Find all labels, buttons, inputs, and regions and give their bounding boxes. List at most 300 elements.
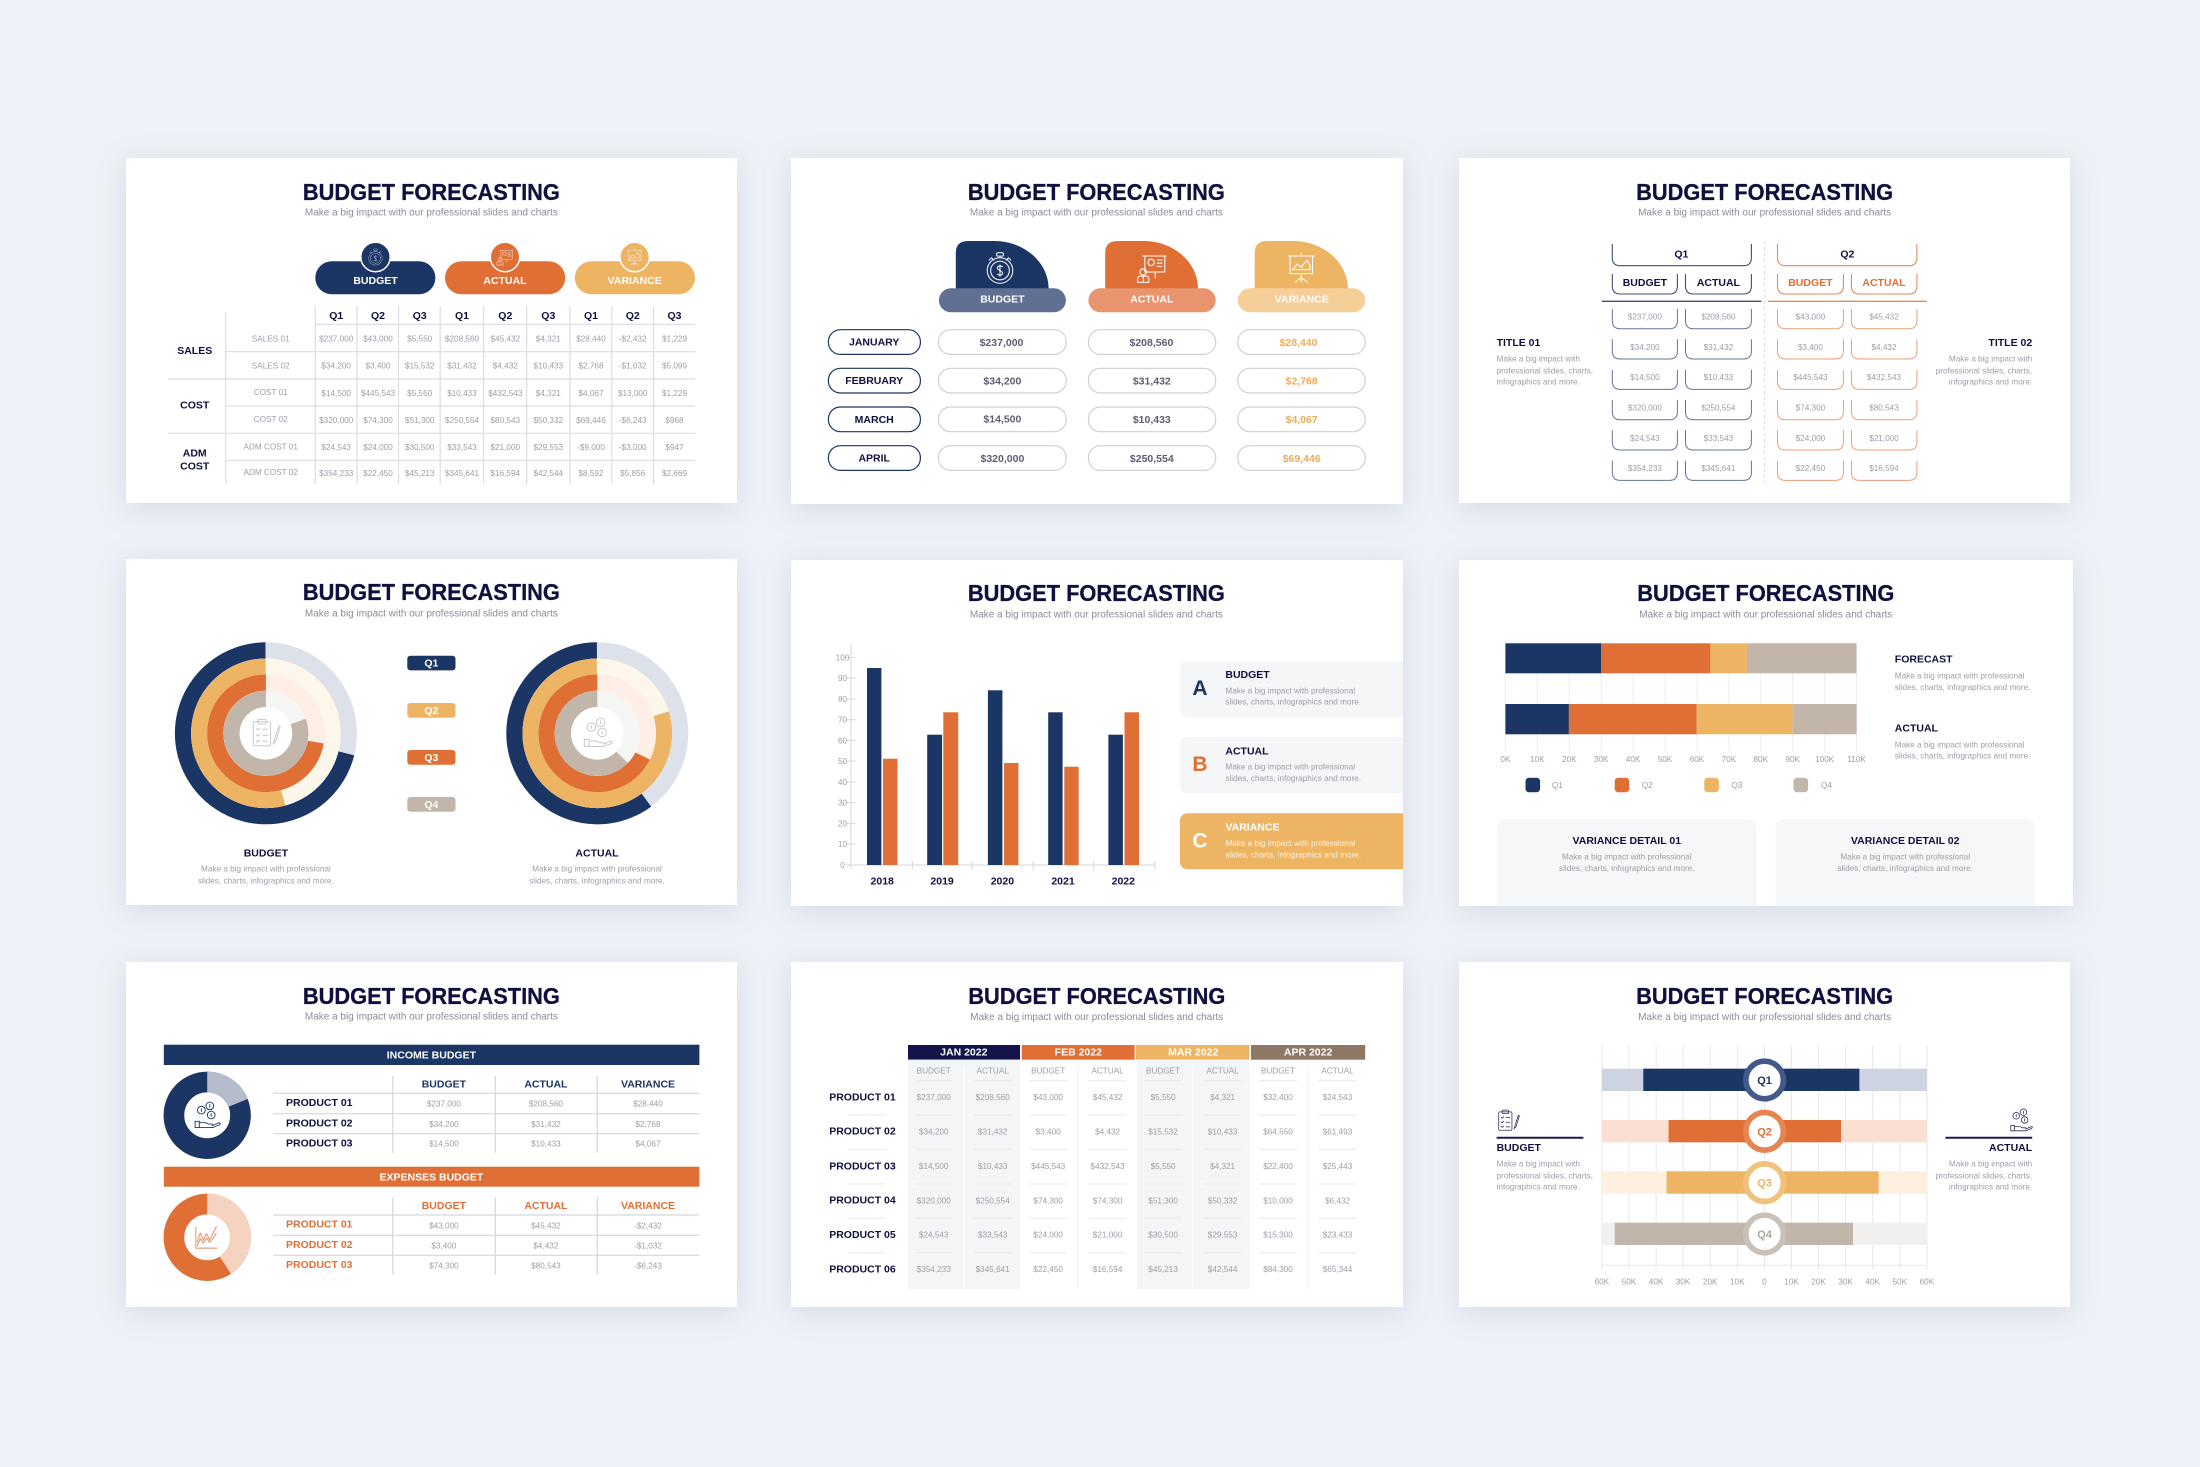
data table: $28,440 bbox=[576, 335, 606, 344]
january row: $208,560 bbox=[1130, 337, 1173, 349]
Q2 column group: $74,300 bbox=[1796, 404, 1826, 412]
data table: Q3 bbox=[667, 310, 682, 322]
legend: Q4 bbox=[1821, 781, 1832, 790]
expenses donut chart bbox=[174, 1204, 240, 1271]
data table: Q3 bbox=[541, 310, 555, 322]
budget header pill bbox=[315, 242, 435, 294]
april row: APRIL bbox=[858, 453, 891, 465]
bar chart: 2020 bbox=[991, 875, 1014, 887]
income table: $31,432 bbox=[531, 1120, 561, 1129]
product data table: BUDGET bbox=[1261, 1066, 1295, 1075]
actual text block: infographics and more. bbox=[1949, 1183, 2032, 1192]
income table: $34,200 bbox=[429, 1120, 459, 1129]
title: BUDGET FORECASTING bbox=[968, 983, 1225, 1009]
card: budget: A bbox=[1192, 677, 1208, 700]
card: variance detail 01: slides, charts, infographics and more. bbox=[1559, 864, 1695, 873]
product data table: PRODUCT 02 bbox=[829, 1126, 896, 1138]
Q1 column group: $31,432 bbox=[1704, 343, 1734, 352]
march row: MARCH bbox=[855, 414, 894, 426]
budget text block: BUDGET bbox=[1497, 1142, 1542, 1154]
product data table: PRODUCT 03 bbox=[829, 1160, 896, 1172]
Q2 column group: $22,450 bbox=[1796, 464, 1826, 473]
budget caption: BUDGET bbox=[244, 847, 289, 859]
expenses table: ACTUAL bbox=[524, 1200, 568, 1212]
data table: $33,543 bbox=[447, 443, 477, 452]
card: budget: Make a big impact with professional bbox=[1225, 686, 1355, 695]
bar chart: 60 bbox=[838, 736, 847, 745]
product data table: $10,433 bbox=[1208, 1127, 1238, 1136]
product data table: $250,554 bbox=[976, 1196, 1010, 1205]
product data table: $50,332 bbox=[1208, 1196, 1238, 1205]
data table: COST 01 bbox=[254, 388, 288, 397]
product data table: $64,550 bbox=[1263, 1127, 1293, 1136]
card: variance detail 02 bbox=[1776, 819, 2035, 906]
january row: $28,440 bbox=[1280, 337, 1318, 349]
product data table: $10,000 bbox=[1263, 1196, 1293, 1205]
income table: PRODUCT 03 bbox=[286, 1137, 353, 1149]
product data table: BUDGET bbox=[1031, 1066, 1065, 1075]
april row bbox=[828, 446, 1365, 470]
product data table: $30,500 bbox=[1148, 1231, 1178, 1240]
icon: line chart bbox=[196, 1226, 217, 1248]
diverging bar chart: Q1 bbox=[1757, 1075, 1772, 1087]
data table: $5,856 bbox=[620, 469, 646, 478]
bar chart: 20 bbox=[838, 820, 847, 828]
bar chart: 2021 bbox=[1051, 875, 1075, 887]
income budget band: INCOME BUDGET bbox=[387, 1050, 477, 1062]
data table: $69,446 bbox=[576, 416, 606, 425]
budget text block: Make a big impact with bbox=[1497, 1160, 1580, 1169]
product data table: $22,400 bbox=[1263, 1162, 1293, 1171]
product data table: $29,553 bbox=[1208, 1231, 1238, 1240]
actual column header bbox=[1088, 241, 1216, 312]
april row: $69,446 bbox=[1283, 453, 1321, 465]
actual text block: Make a big impact with bbox=[1949, 1160, 2033, 1169]
diverging bar chart: 10K bbox=[1730, 1277, 1745, 1286]
expenses table bbox=[273, 1197, 699, 1274]
Q1 column group: $14,500 bbox=[1630, 373, 1660, 382]
panel: monthly budget pills bbox=[791, 158, 1403, 504]
variance header pill: VARIANCE bbox=[608, 275, 662, 287]
forecast text block: Make a big impact with professional bbox=[1895, 671, 2025, 680]
data table: $237,000 bbox=[319, 335, 354, 344]
panel: stacked bars bbox=[1459, 560, 2073, 906]
income table: PRODUCT 01 bbox=[286, 1097, 353, 1109]
subtitle: Make a big impact with our professional slides and charts bbox=[970, 610, 1223, 621]
Q2 column group bbox=[1768, 244, 1927, 480]
title: BUDGET FORECASTING bbox=[1636, 983, 1893, 1009]
expenses table: PRODUCT 03 bbox=[286, 1259, 353, 1271]
expenses budget band: EXPENSES BUDGET bbox=[379, 1172, 484, 1184]
bar chart: 30 bbox=[838, 799, 847, 808]
subtitle: Make a big impact with our professional slides and charts bbox=[305, 1012, 558, 1023]
actual text block: professional slides, charts, bbox=[1936, 1171, 2032, 1180]
card: variance detail 02: Make a big impact with professional bbox=[1840, 852, 1970, 861]
title 02 text block: infographics and more. bbox=[1949, 378, 2032, 387]
january row: $237,000 bbox=[980, 337, 1024, 349]
panel: income and expenses budget bbox=[126, 962, 737, 1307]
budget caption bbox=[198, 847, 334, 885]
card: variance: C bbox=[1192, 830, 1208, 853]
data table: $1,229 bbox=[662, 335, 687, 344]
bar chart: 2022 bbox=[1112, 875, 1135, 887]
product data table: $74,300 bbox=[1033, 1196, 1063, 1205]
data table: ADM COST 01 bbox=[243, 442, 298, 451]
income table: $4,067 bbox=[635, 1140, 661, 1149]
Q2 column group: $432,543 bbox=[1867, 373, 1902, 382]
diverging bar chart: Q3 bbox=[1757, 1178, 1772, 1190]
expenses table: -$1,032 bbox=[634, 1242, 662, 1251]
data table bbox=[168, 306, 695, 484]
product data table: $15,300 bbox=[1263, 1231, 1293, 1240]
data table: $250,554 bbox=[445, 416, 480, 425]
data table: COST bbox=[180, 399, 210, 411]
data table: $320,000 bbox=[319, 416, 354, 425]
diverging bar chart: 30K bbox=[1838, 1277, 1853, 1286]
bar chart: 2018 bbox=[871, 875, 894, 887]
data table: Q3 bbox=[413, 310, 427, 322]
data table: $31,432 bbox=[447, 362, 477, 371]
title: BUDGET FORECASTING bbox=[968, 179, 1225, 205]
subtitle: Make a big impact with our professional slides and charts bbox=[1638, 207, 1891, 218]
data table: $4,321 bbox=[536, 389, 561, 398]
product data table: $237,000 bbox=[917, 1093, 951, 1102]
product data table: $23,433 bbox=[1323, 1231, 1353, 1240]
actual text block bbox=[1895, 723, 2030, 761]
product data table: $16,594 bbox=[1093, 1265, 1123, 1274]
data table: -$2,432 bbox=[619, 335, 647, 344]
expenses table: BUDGET bbox=[422, 1200, 467, 1212]
data table: $42,544 bbox=[533, 469, 564, 478]
product data table: $74,300 bbox=[1093, 1196, 1123, 1205]
data table: Q2 bbox=[626, 310, 640, 322]
data table: Q2 bbox=[371, 310, 385, 322]
data table: $24,543 bbox=[321, 443, 351, 452]
income table: VARIANCE bbox=[621, 1078, 675, 1090]
data table: -$3,000 bbox=[619, 443, 647, 452]
title 01 text block: Make a big impact with bbox=[1497, 355, 1580, 364]
product data table: $45,213 bbox=[1148, 1265, 1178, 1274]
bar chart: 40 bbox=[838, 778, 847, 787]
card: variance detail 01: Make a big impact with professional bbox=[1562, 852, 1692, 861]
bar chart: 2019 bbox=[930, 875, 954, 887]
expenses table: -$2,432 bbox=[634, 1221, 662, 1230]
data table: $3,400 bbox=[365, 362, 391, 371]
product data table: $5,550 bbox=[1151, 1162, 1176, 1171]
month header bars: APR 2022 bbox=[1284, 1047, 1332, 1059]
february row: $2,768 bbox=[1286, 375, 1318, 387]
product data table: ACTUAL bbox=[1321, 1066, 1354, 1075]
title 02 text block: professional slides, charts, bbox=[1936, 366, 2032, 375]
expenses table: $3,400 bbox=[431, 1242, 457, 1251]
diverging bar chart: 40K bbox=[1649, 1277, 1664, 1286]
budget caption: Make a big impact with professional bbox=[201, 865, 331, 874]
month header bars: FEB 2022 bbox=[1055, 1047, 1102, 1059]
product data table: ACTUAL bbox=[1091, 1066, 1124, 1075]
stacked bar chart: 50K bbox=[1658, 755, 1673, 764]
product data table: $320,000 bbox=[917, 1196, 951, 1205]
product data table: PRODUCT 06 bbox=[829, 1263, 896, 1275]
product data table: PRODUCT 04 bbox=[829, 1195, 896, 1207]
february row bbox=[828, 368, 1365, 393]
product data table: $25,443 bbox=[1323, 1162, 1353, 1171]
stacked bar chart: 30K bbox=[1594, 755, 1609, 764]
month header bars: JAN 2022 bbox=[940, 1047, 988, 1059]
data table: $947 bbox=[665, 443, 684, 452]
data table: $10,433 bbox=[533, 362, 564, 371]
title: BUDGET FORECASTING bbox=[1636, 179, 1893, 205]
product data table: ACTUAL bbox=[1206, 1066, 1239, 1075]
Q2 column group: $16,594 bbox=[1869, 464, 1899, 473]
budget text block bbox=[1497, 1110, 1593, 1192]
stacked bar chart bbox=[1500, 643, 1866, 764]
expenses table: PRODUCT 02 bbox=[286, 1239, 353, 1251]
title: BUDGET FORECASTING bbox=[1637, 580, 1894, 606]
product data table: $354,233 bbox=[917, 1265, 951, 1274]
data table: $432,543 bbox=[488, 389, 523, 398]
data table: $34,200 bbox=[321, 362, 351, 371]
january row bbox=[828, 330, 1365, 354]
product data table: $42,544 bbox=[1208, 1265, 1238, 1274]
actual header pill: ACTUAL bbox=[483, 275, 527, 287]
forecast text block: FORECAST bbox=[1895, 654, 1953, 666]
april row: $250,554 bbox=[1130, 453, 1174, 465]
expenses table: $45,432 bbox=[531, 1221, 561, 1230]
legend bbox=[1526, 778, 1832, 792]
income table: $14,500 bbox=[429, 1140, 459, 1149]
data table: $30,500 bbox=[405, 443, 435, 452]
Q2 column group: BUDGET bbox=[1788, 277, 1833, 289]
product data table: $15,532 bbox=[1148, 1127, 1178, 1136]
title 01 text block: infographics and more. bbox=[1497, 378, 1580, 387]
bar chart: 0 bbox=[840, 861, 845, 870]
product data table: $61,493 bbox=[1323, 1127, 1353, 1136]
data table: $22,450 bbox=[363, 469, 393, 478]
card: variance detail 02: slides, charts, infographics and more. bbox=[1837, 864, 1973, 873]
product data table: BUDGET bbox=[917, 1066, 951, 1075]
product data table: $14,500 bbox=[919, 1162, 949, 1171]
data table: $208,560 bbox=[445, 335, 480, 344]
actual caption: Make a big impact with professional bbox=[532, 865, 662, 874]
data table: SALES bbox=[177, 345, 212, 357]
data table: SALES 01 bbox=[252, 335, 290, 344]
forecast text block: slides, charts, infographics and more. bbox=[1895, 683, 2030, 692]
Q2 column group: $80,543 bbox=[1869, 404, 1899, 412]
data table: $8,592 bbox=[578, 469, 604, 478]
Q2 column group: $24,000 bbox=[1796, 434, 1826, 443]
data table: -$9,000 bbox=[577, 443, 605, 452]
actual text block: ACTUAL bbox=[1989, 1142, 2033, 1154]
product data table bbox=[829, 1060, 1356, 1289]
data table: Q2 bbox=[498, 310, 512, 322]
actual text block: Make a big impact with professional bbox=[1895, 740, 2025, 749]
march row: $14,500 bbox=[983, 413, 1022, 425]
income table: $28,440 bbox=[633, 1100, 663, 1109]
expenses budget band bbox=[164, 1167, 699, 1187]
forecast text block bbox=[1895, 654, 2030, 692]
bar chart: 90 bbox=[838, 674, 847, 683]
card: budget: BUDGET bbox=[1225, 669, 1270, 681]
diverging bar chart: 20K bbox=[1703, 1277, 1718, 1286]
diverging bar chart: Q4 bbox=[1757, 1229, 1773, 1241]
month header bars bbox=[908, 1045, 1365, 1060]
diverging bar chart: 20K bbox=[1811, 1277, 1826, 1286]
budget header pill: BUDGET bbox=[353, 275, 398, 287]
title: BUDGET FORECASTING bbox=[968, 580, 1225, 606]
data table: $13,000 bbox=[618, 389, 648, 398]
data table: COST 02 bbox=[254, 415, 288, 424]
data table: $14,500 bbox=[321, 389, 351, 398]
Q2 column group: $21,000 bbox=[1869, 434, 1899, 443]
income table: ACTUAL bbox=[524, 1078, 568, 1090]
diverging bar chart: Q2 bbox=[1757, 1126, 1772, 1138]
actual text block bbox=[1936, 1109, 2033, 1192]
data table: $16,594 bbox=[490, 469, 521, 478]
actual text block: ACTUAL bbox=[1895, 723, 1939, 735]
data table: $80,543 bbox=[490, 416, 521, 425]
card: budget bbox=[1180, 661, 1403, 717]
income budget band bbox=[164, 1045, 699, 1065]
stacked bar chart: 60K bbox=[1690, 755, 1705, 764]
Q2 column group: $445,543 bbox=[1793, 373, 1828, 382]
subtitle: Make a big impact with our professional slides and charts bbox=[305, 207, 558, 218]
diverging bar chart: 0 bbox=[1762, 1277, 1767, 1286]
march row bbox=[828, 407, 1365, 432]
expenses table: VARIANCE bbox=[621, 1200, 675, 1212]
panel: Q1 and Q2 bracket table bbox=[1459, 158, 2070, 503]
card: variance: VARIANCE bbox=[1225, 822, 1279, 834]
january row: JANUARY bbox=[849, 337, 899, 349]
legend: Q1 bbox=[424, 658, 439, 670]
stacked bar chart: 0K bbox=[1500, 755, 1511, 764]
title: BUDGET FORECASTING bbox=[303, 579, 560, 605]
Q1 column group: $24,543 bbox=[1630, 434, 1660, 443]
month header bars: MAR 2022 bbox=[1168, 1047, 1218, 1059]
product data table: $22,450 bbox=[1033, 1265, 1063, 1274]
data table: SALES 02 bbox=[252, 362, 290, 371]
variance column header bbox=[1238, 241, 1365, 312]
data table: $21,000 bbox=[490, 443, 521, 452]
data table: $4,067 bbox=[578, 389, 604, 398]
data table: $4,432 bbox=[493, 362, 518, 371]
actual text block: slides, charts, infographics and more. bbox=[1895, 752, 2030, 761]
product data table: $24,543 bbox=[1323, 1093, 1353, 1102]
data table: $2,669 bbox=[662, 469, 687, 478]
data table: $968 bbox=[665, 416, 684, 425]
title: BUDGET FORECASTING bbox=[303, 179, 560, 205]
data table: COST bbox=[180, 460, 210, 472]
card: actual: slides, charts, infographics and more. bbox=[1225, 774, 1361, 783]
panel: diverging bars bbox=[1459, 962, 2070, 1307]
data table: $345,641 bbox=[445, 469, 480, 478]
product data table: $84,300 bbox=[1263, 1265, 1293, 1274]
Q2 column group: ACTUAL bbox=[1862, 277, 1906, 289]
data table: $51,300 bbox=[405, 416, 435, 425]
stacked bar chart: 80K bbox=[1754, 755, 1769, 764]
card: variance bbox=[1180, 813, 1403, 869]
data table: $2,768 bbox=[578, 362, 604, 371]
data table: -$1,032 bbox=[619, 362, 647, 371]
budget caption: slides, charts, infographics and more. bbox=[198, 876, 334, 885]
subtitle: Make a big impact with our professional slides and charts bbox=[970, 207, 1223, 218]
data table: $4,321 bbox=[536, 335, 561, 344]
card: actual: ACTUAL bbox=[1225, 745, 1269, 757]
Q2 column group: Q2 bbox=[1840, 248, 1855, 260]
stacked bar chart: 90K bbox=[1785, 755, 1801, 764]
expenses table: PRODUCT 01 bbox=[286, 1219, 353, 1231]
variance header pill bbox=[575, 242, 695, 294]
bar chart: 100 bbox=[836, 653, 850, 662]
Q2 column group: $3,400 bbox=[1798, 343, 1823, 352]
product data table: $4,432 bbox=[1095, 1127, 1121, 1136]
icon: coins in hand bbox=[195, 1102, 220, 1128]
legend: Q2 bbox=[1642, 781, 1653, 790]
legend bbox=[407, 656, 456, 812]
title 02 text block: TITLE 02 bbox=[1988, 337, 2032, 349]
diverging bar chart: 30K bbox=[1676, 1277, 1691, 1286]
expenses table: $4,432 bbox=[533, 1242, 559, 1251]
data table: $5,099 bbox=[662, 362, 687, 371]
diverging bar chart bbox=[1595, 1045, 1935, 1286]
product data table: $34,200 bbox=[919, 1127, 949, 1136]
Q1 column group: $250,554 bbox=[1701, 404, 1736, 412]
data table: $445,543 bbox=[361, 389, 396, 398]
variance column header: VARIANCE bbox=[1275, 294, 1329, 306]
product data table: $43,000 bbox=[1033, 1093, 1063, 1102]
Q2 column group: $43,000 bbox=[1796, 312, 1826, 322]
data table: Q1 bbox=[329, 310, 343, 322]
radial chart: actual bbox=[481, 617, 713, 849]
actual caption: slides, charts, infographics and more. bbox=[529, 876, 665, 885]
icon: coins in hand bbox=[584, 718, 612, 746]
product data table: $21,000 bbox=[1093, 1231, 1123, 1240]
bar chart: 10 bbox=[838, 840, 847, 849]
product data table: ACTUAL bbox=[977, 1066, 1009, 1075]
data table: $50,332 bbox=[533, 416, 564, 425]
product data table: $65,344 bbox=[1323, 1265, 1353, 1274]
income donut chart bbox=[174, 1082, 240, 1149]
expenses table: -$6,243 bbox=[634, 1261, 662, 1270]
subtitle: Make a big impact with our professional slides and charts bbox=[1638, 1012, 1891, 1023]
bar chart bbox=[836, 643, 1155, 887]
budget column header: BUDGET bbox=[980, 294, 1025, 306]
legend: Q4 bbox=[424, 799, 439, 811]
budget text block: infographics and more. bbox=[1497, 1183, 1580, 1192]
data table: $45,213 bbox=[405, 469, 435, 478]
april row: $320,000 bbox=[981, 453, 1024, 465]
february row: $31,432 bbox=[1133, 375, 1171, 387]
data table: Q1 bbox=[584, 310, 598, 322]
data table: -$6,243 bbox=[619, 416, 647, 425]
Q1 column group: BUDGET bbox=[1623, 277, 1668, 289]
product data table: $24,543 bbox=[919, 1231, 949, 1240]
Q2 column group: $45,432 bbox=[1869, 312, 1899, 322]
data table: $10,433 bbox=[447, 389, 477, 398]
card: variance: slides, charts, infographics and more. bbox=[1225, 851, 1361, 860]
diverging bar chart: 60K bbox=[1595, 1277, 1610, 1286]
card: variance detail 01: VARIANCE DETAIL 01 bbox=[1573, 835, 1681, 847]
expenses table: $43,000 bbox=[429, 1221, 459, 1230]
data table: $24,000 bbox=[363, 443, 393, 452]
Q1 column group: $320,000 bbox=[1628, 404, 1662, 412]
Q1 column group: ACTUAL bbox=[1697, 277, 1741, 289]
data table: $15,532 bbox=[405, 362, 435, 371]
march row: $4,067 bbox=[1286, 414, 1318, 426]
product data table: $4,321 bbox=[1210, 1093, 1236, 1102]
panel: monthly product table bbox=[791, 962, 1403, 1307]
actual column header: ACTUAL bbox=[1130, 294, 1174, 306]
march row: $10,433 bbox=[1133, 414, 1171, 426]
